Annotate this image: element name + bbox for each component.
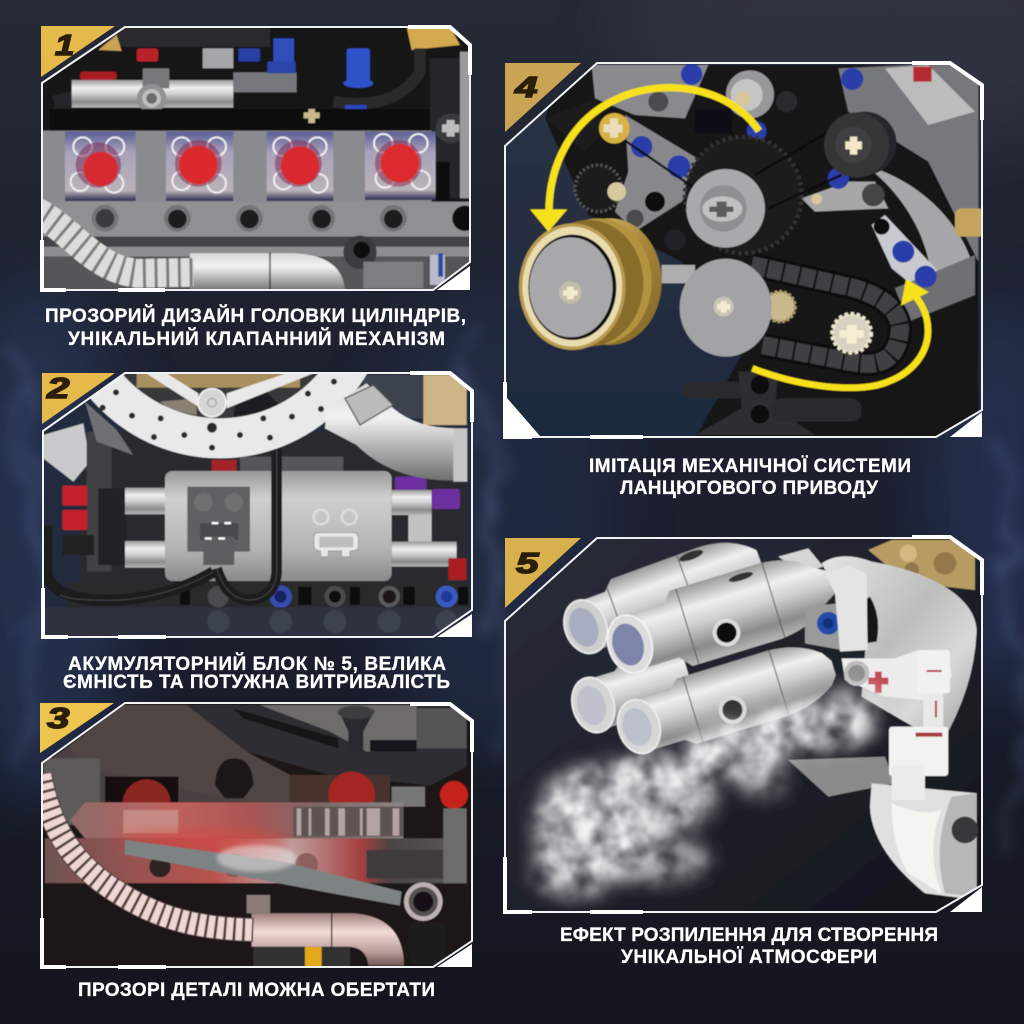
blue ball joint [805, 603, 842, 650]
caption 5: ЕФЕКТ РОЗПИЛЕННЯ ДЛЯ СТВОРЕННЯ [560, 925, 938, 946]
black pulley [824, 112, 897, 178]
bottom black beams [682, 372, 862, 435]
battery box [165, 471, 392, 581]
number badge 3: 3 [47, 703, 70, 735]
grey pulley [686, 169, 765, 248]
panel 2: battery block [41, 371, 474, 688]
red cylinders behind [104, 770, 469, 810]
dark lower area [46, 882, 468, 909]
transparent top bar [70, 802, 403, 853]
blue connector pins [631, 64, 937, 288]
black cables [47, 448, 277, 600]
transparent cylinder caps [65, 132, 436, 201]
frame 2 [43, 373, 472, 637]
panel 3: transparent rotating parts [30, 695, 477, 1001]
lower white pipe with brake disc [788, 757, 978, 900]
left clips [43, 423, 457, 572]
cylinder: front top [598, 544, 845, 688]
belts [622, 130, 842, 208]
white T connector and nozzle [842, 650, 952, 800]
caption 1 [45, 305, 466, 350]
caption 1: ПРОЗОРИЙ ДИЗАЙН ГОЛОВКИ ЦИЛІНДРІВ, [45, 305, 466, 327]
ribbed hose [37, 212, 193, 273]
caption 1: УНІКАЛЬНИЙ КЛАПАННИЙ МЕХАНІЗМ [68, 328, 445, 350]
purple parts [395, 477, 460, 509]
cylinder: lower back [564, 644, 699, 743]
grey frame arms [545, 65, 985, 322]
lower beam with holes [42, 202, 478, 292]
lower housing [44, 808, 468, 884]
white bracket [825, 566, 868, 652]
caption 2: ЄМНІСТЬ ТА ПОТУЖНА ВИТРИВАЛІСТЬ [63, 672, 450, 693]
sprockets [765, 292, 871, 353]
tan bricks corner [868, 540, 975, 590]
frame 4 [505, 63, 982, 437]
number badge 2: 2 [46, 373, 70, 405]
lower rail [43, 582, 470, 639]
chrome pipe [190, 253, 345, 292]
panel 1: cylinder heads [30, 15, 478, 350]
arrow: bottom yellow curve [752, 279, 929, 388]
caption 5 [560, 925, 938, 968]
frame 3 [42, 703, 472, 967]
angled translucent lever [125, 840, 402, 906]
panel 5: spray effect [495, 529, 993, 968]
top pulley [726, 70, 774, 118]
caption 2 [63, 653, 450, 693]
cylinder: lower front [609, 634, 843, 765]
number badge 1: 1 [55, 29, 74, 61]
upper plate [43, 705, 467, 825]
top beam and coloured parts [79, 28, 461, 110]
black gear [575, 137, 802, 253]
upper grey beam [42, 131, 432, 202]
right arm with knob [430, 52, 470, 198]
caption 4 [589, 456, 911, 499]
golden flywheel [521, 218, 662, 348]
chrome pink pipe [252, 912, 404, 966]
frame 5 [505, 537, 982, 912]
caption 2: АКУМУЛЯТОРНИЙ БЛОК № 5, ВЕЛИКА [68, 653, 446, 675]
panel 4: chain drive [495, 55, 993, 499]
chrome elbow pipe [325, 383, 467, 482]
ribbed pink hose [40, 775, 253, 930]
perforated white disc [84, 374, 368, 460]
grey cross cylinder [52, 68, 234, 110]
number badge 1 [41, 26, 115, 77]
number badge 4 [505, 63, 581, 132]
grey disc [680, 259, 772, 357]
number badge 3 [40, 703, 114, 753]
caption 4: ЛАНЦЮГОВОГО ПРИВОДУ [620, 478, 878, 499]
caption 5: УНІКАЛЬНОЇ АТМОСФЕРИ [621, 947, 877, 968]
spray smoke [532, 687, 885, 897]
number badge 5 [505, 538, 581, 608]
caption 3: ПРОЗОРІ ДЕТАЛІ МОЖНА ОБЕРТАТИ [78, 980, 435, 1001]
number badge 4: 4 [514, 72, 538, 104]
chain [752, 265, 900, 364]
number badge 2 [42, 373, 115, 424]
number badge 5: 5 [516, 548, 540, 580]
cylinder: back top [554, 529, 773, 668]
frame 1 [42, 27, 470, 290]
icon: tan cross axle [304, 109, 320, 123]
arrow: top yellow curve [530, 88, 759, 232]
yellow knob [599, 113, 630, 144]
bearing ring [404, 882, 443, 921]
chrome elbow [778, 548, 977, 743]
caption 4: ІМІТАЦІЯ МЕХАНІЧНОЇ СИСТЕМИ [589, 456, 911, 477]
